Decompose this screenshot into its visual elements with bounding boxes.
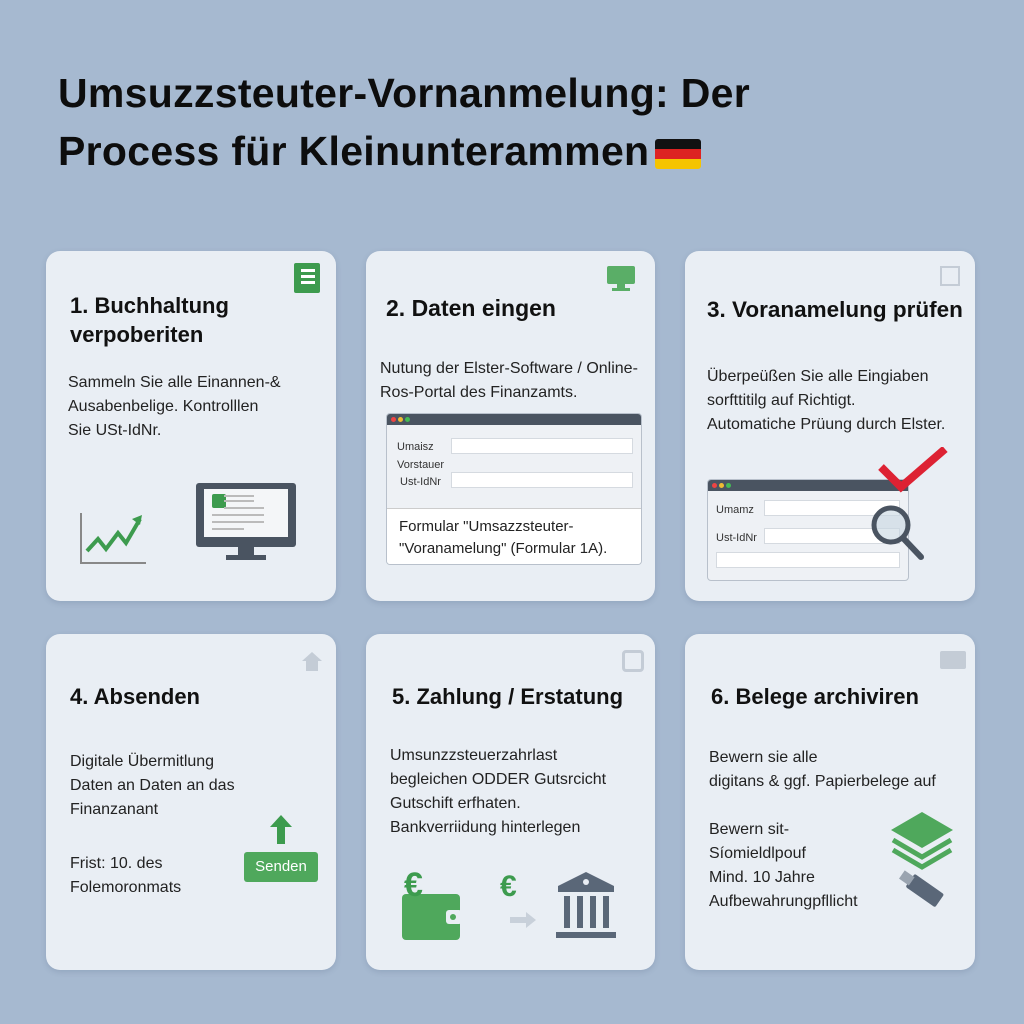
- text: Digitale Übermitlung: [70, 753, 214, 770]
- title: Umsuzzsteuter-Vornanmelung: Der: [58, 70, 750, 116]
- text: Sie USt-IdNr.: [68, 422, 161, 439]
- text: Automatiche Prüung durch Elster.: [707, 416, 945, 433]
- text 2: [709, 821, 858, 910]
- text: deadline: [70, 855, 181, 896]
- form window: Vorstauer: [397, 459, 444, 471]
- text: Ausabenbelige. Kontrolllen: [68, 398, 258, 415]
- icon: send button: Senden: [255, 858, 307, 875]
- heading: verpoberiten: [70, 322, 203, 347]
- heading: 5. Zahlung / Erstatung: [392, 684, 623, 709]
- text: Nutung der Elster-Software / Online-: [380, 360, 638, 377]
- panel: step 4: [46, 634, 336, 970]
- icon: wallet, euro, bank: €: [500, 870, 517, 903]
- panel: step 2: [366, 251, 655, 601]
- heading: 6. Belege archiviren: [711, 684, 919, 709]
- form window: Formular "Umsazzsteuter-: [399, 518, 574, 535]
- text: Bewern sie alle: [709, 749, 818, 766]
- text: [709, 749, 936, 790]
- title: Process für Kleinunterammen: [58, 128, 649, 174]
- text: deadline: Folemoronmats: [70, 879, 181, 896]
- form window with magnifier: Ust-IdNr: [716, 532, 757, 544]
- panel: step 3: [685, 251, 975, 601]
- icon: layers and usb: [891, 812, 953, 907]
- icon: folder: [940, 651, 966, 669]
- icon: faint: [940, 266, 960, 286]
- icon: wallet, euro, bank: €: [404, 866, 423, 904]
- text 2: Mind. 10 Jahre: [709, 869, 815, 886]
- text: Daten an Daten an das: [70, 777, 235, 794]
- text: Sammeln Sie alle Einannen-&: [68, 374, 281, 391]
- icon: ledger: [294, 263, 320, 293]
- text: digitans & ggf. Papierbelege auf: [709, 773, 936, 790]
- text: [707, 368, 945, 433]
- icon: send button: [244, 815, 318, 882]
- form window: Umaisz: [397, 441, 434, 453]
- text: [390, 747, 606, 836]
- icon: monitor small: [607, 266, 635, 291]
- icon: faint: [622, 650, 644, 672]
- panel: step 6: [685, 634, 975, 970]
- text: sorfttitilg auf Richtigt.: [707, 392, 856, 409]
- text: begleichen ODDER Gutsrcicht: [390, 771, 606, 788]
- form window: Ust-IdNr: [400, 476, 441, 488]
- heading: 4. Absenden: [70, 684, 200, 709]
- panel: step 1: [46, 251, 336, 601]
- text: [380, 360, 638, 401]
- heading: 1. Buchhaltung: [70, 293, 229, 318]
- text: deadline: Frist: 10. des: [70, 855, 162, 872]
- form window with magnifier: [707, 447, 948, 581]
- heading: 2. Daten eingen: [386, 295, 556, 321]
- text: [68, 374, 281, 439]
- text: Überpeüßen Sie alle Eingiaben: [707, 368, 928, 385]
- text 2: Aufbewahrungpfllicht: [709, 893, 858, 910]
- text: Bankverriidung hinterlegen: [390, 819, 580, 836]
- text 2: Bewern sit-: [709, 821, 789, 838]
- icon: monitor: [196, 483, 296, 560]
- text: Ros-Portal des Finanzamts.: [380, 384, 577, 401]
- heading: [70, 293, 229, 347]
- text: [70, 752, 235, 818]
- panel: step 5: [366, 634, 655, 970]
- form window: "Voranamelung" (Formular 1A).: [399, 540, 607, 557]
- text: Finanzanant: [70, 801, 158, 818]
- text: Umsunzzsteuerzahrlast: [390, 747, 557, 764]
- icon: chart: [80, 513, 146, 564]
- heading: 3. Voranamelung prüfen: [707, 297, 963, 322]
- title: [58, 70, 750, 174]
- form window with magnifier: Umamz: [716, 504, 754, 516]
- text: Gutschift erfhaten.: [390, 795, 521, 812]
- icon: wallet, euro, bank: [402, 866, 616, 940]
- icon: house: [302, 652, 322, 671]
- form window: [386, 413, 642, 565]
- text 2: Síomieldlpouf: [709, 845, 806, 862]
